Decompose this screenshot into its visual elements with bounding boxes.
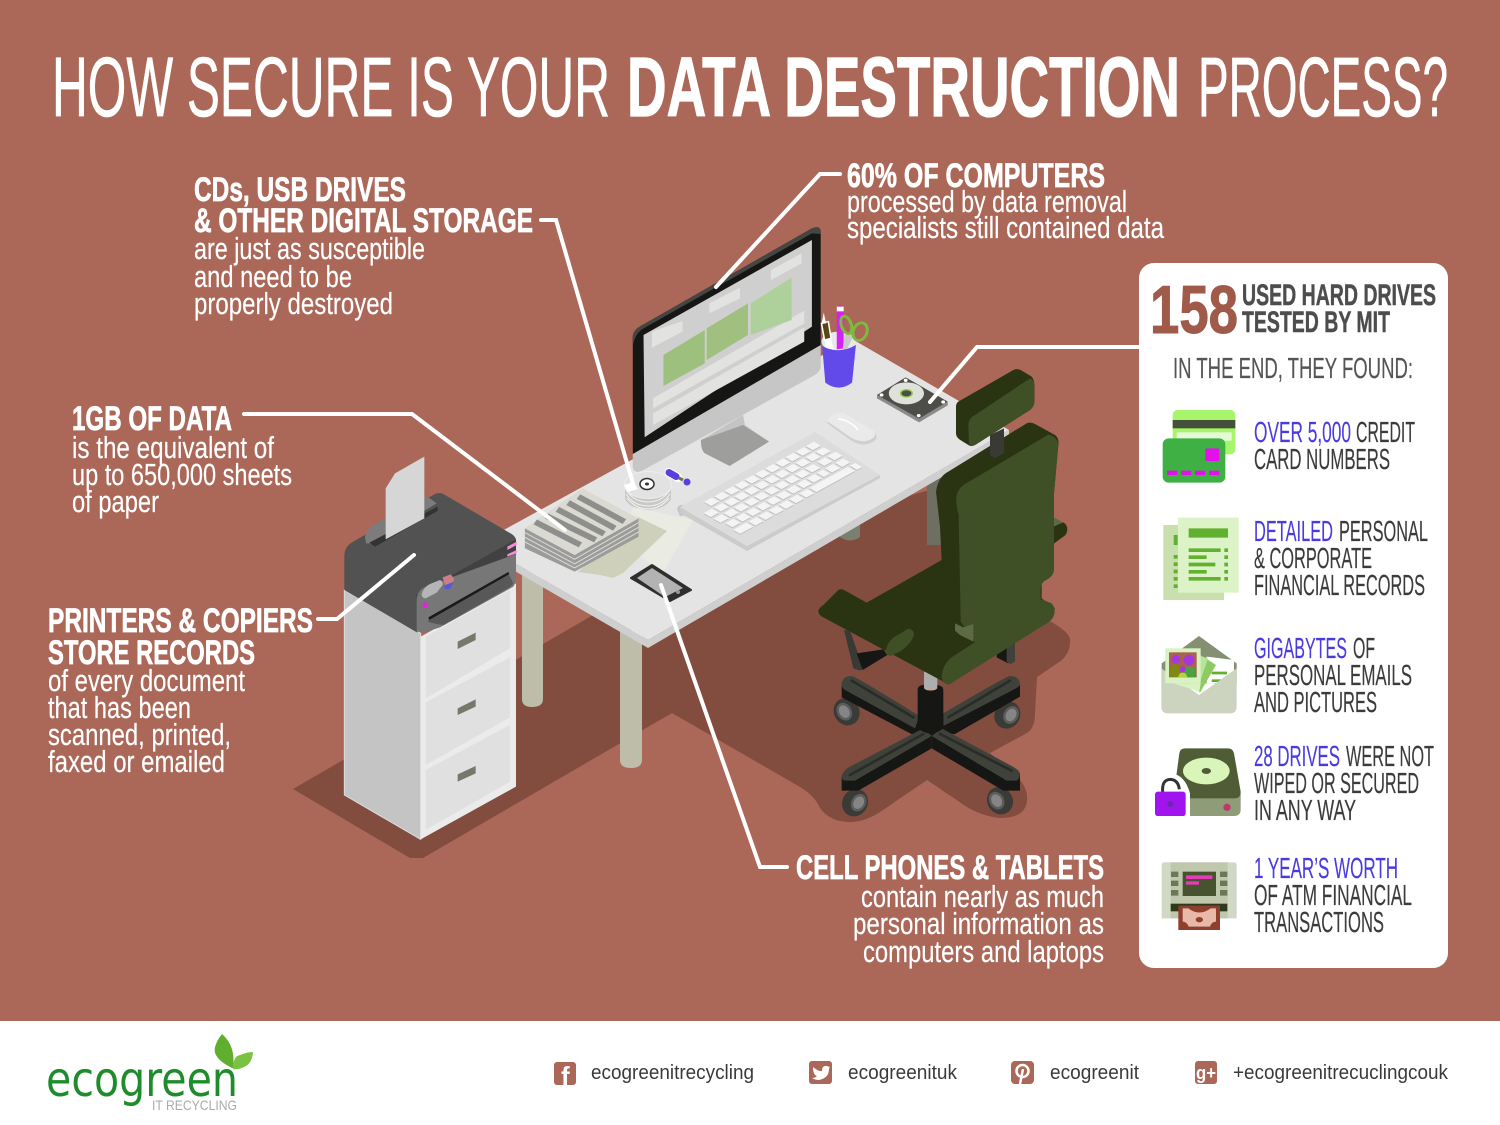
desk legs [522,470,941,768]
seat supports [844,617,1015,671]
callout: printers and copiers: of every document [48,663,245,698]
callout: 1GB of data: of paper [72,484,159,519]
social: twitter [809,1061,958,1084]
printer on filing cabinet [344,457,517,839]
callout: printers and copiers: PRINTERS & COPIERS [48,602,313,640]
leader: cell phones [661,585,787,867]
text: ATM transactions: TRANSACTIONS [1254,907,1384,939]
hard drive [877,377,948,422]
paper tray [365,496,438,547]
gas cylinder [918,672,943,733]
printer controls [422,542,517,625]
title: HOW SECURE IS YOUR [52,40,610,134]
callout: printers and copiers: that has been [48,690,191,725]
callout: printers and copiers: faxed or emailed [48,744,225,779]
social: pinterest [1011,1061,1139,1084]
leader: 1GB of data [244,414,565,530]
text: credit cards: CREDIT [1356,417,1415,449]
monitor [633,227,821,472]
office chair [818,369,1067,821]
callout: 1GB of data [72,400,292,519]
keyboard keys [697,443,859,533]
footer [0,1021,1500,1125]
callout: 1GB of data: is the equivalent of [72,430,274,465]
leader: printers [318,555,414,619]
icon: unlocked hard drive [1152,748,1241,820]
social: twitter: ecogreenituk [848,1062,958,1084]
callout: digital storage [194,171,533,321]
leader: hard drives [930,347,1139,402]
callout: cell phones and tablets: computers and laptops [863,934,1104,969]
social: facebook [554,1061,754,1091]
text: credit cards [1254,417,1415,476]
cabinet front with drawers [421,583,516,839]
phone [631,565,691,601]
callout: printers and copiers [48,602,313,779]
text: ATM transactions: 1 YEAR’S WORTH [1254,853,1398,885]
mouse [827,413,876,445]
paper stack [525,488,639,572]
headrest post [990,428,1004,458]
social: google plus: +ecogreenitrecuclingcouk [1233,1062,1449,1084]
callout: digital storage: properly destroyed [194,286,393,321]
icon: financial documents [1163,518,1239,600]
text: financial records: DETAILED [1254,516,1333,548]
seat [818,550,1055,684]
callout: digital storage: & OTHER DIGITAL STORAGE [194,202,533,240]
panel: MIT hard drive findings [1139,263,1448,968]
callout: 1GB of data: 1GB OF DATA [72,400,232,438]
keyboard base [677,432,880,551]
callout: digital storage: and need to be [194,259,352,294]
pen cup [821,304,869,388]
monitor screen [644,240,812,437]
star base [842,676,1020,791]
desk illustration [480,227,1009,768]
icon: envelope with pictures [1161,636,1237,713]
text: credit cards: CARD NUMBERS [1254,444,1390,476]
paper sheet [386,457,424,539]
text: emails and pictures [1254,633,1412,719]
text: financial records: & CORPORATE [1254,543,1372,575]
callout: 1GB of data: up to 650,000 sheets [72,457,292,492]
icon: credit cards [1163,410,1235,483]
callout: 60% of computers: specialists still contained data [847,210,1165,245]
leader lines [244,174,1139,867]
text: unsecured drives: 28 DRIVES [1254,741,1340,773]
social: pinterest: ecogreenit [1050,1062,1139,1084]
chair back [936,423,1059,642]
text: unsecured drives: WERE NOT [1346,741,1434,773]
callout: printers and copiers: STORE RECORDS [48,634,255,672]
callout: cell phones and tablets: CELL PHONES & TABLETS [796,849,1104,887]
logo [46,1034,253,1113]
callout: 60% of computers: processed by data removal [847,184,1127,219]
logo wordmark: ecogreen [46,1052,238,1108]
text: unsecured drives: IN ANY WAY [1254,795,1356,827]
monitor bezel [633,227,821,454]
text: emails and pictures: AND PICTURES [1254,687,1377,719]
wheels [829,693,1025,821]
social: facebook: f [561,1061,570,1091]
text: ATM transactions [1254,853,1412,939]
panel heading [1150,272,1436,385]
papers under stack [578,507,693,578]
cabinet side [344,590,421,839]
right armrest [1050,516,1067,544]
disc stack [624,472,672,510]
logo leaves [215,1034,253,1069]
callout: digital storage: are just as susceptible [194,231,425,266]
panel heading: TESTED BY MIT [1242,306,1390,339]
leader: computers [716,174,840,287]
callout: printers and copiers: scanned, printed, [48,717,231,752]
floor shadow [293,490,1070,858]
callout: cell phones and tablets: contain nearly as much [861,879,1104,914]
desk top [480,339,1009,648]
headrest [956,369,1034,446]
monitor chin [633,343,821,472]
callout: cell phones and tablets: personal information as [853,906,1104,941]
text: unsecured drives [1254,741,1434,827]
leader: digital storage [541,220,634,487]
desk accessories [525,304,948,601]
text: credit cards: OVER 5,000 [1254,417,1351,449]
printer body [344,493,516,633]
social: google plus: g+ [1196,1063,1216,1083]
text: financial records [1254,516,1428,602]
text: emails and pictures: OF [1353,633,1375,665]
callout: digital storage: CDs, USB DRIVES [194,171,406,209]
callout: cell phones and tablets [796,849,1104,969]
logo tagline: IT RECYCLING [152,1097,237,1113]
callout: 60% of computers [847,157,1165,245]
icon: ATM [1162,862,1237,930]
text: financial records: PERSONAL [1339,516,1428,548]
title [52,40,1448,134]
panel heading: 158 [1150,272,1238,348]
title: DATA DESTRUCTION [627,40,1180,134]
USB drive [669,472,690,486]
social: facebook: ecogreenitrecycling [591,1062,754,1084]
callout: 60% of computers: 60% OF COMPUTERS [847,157,1105,195]
text: emails and pictures: GIGABYTES [1254,633,1347,665]
monitor stand [701,415,769,466]
